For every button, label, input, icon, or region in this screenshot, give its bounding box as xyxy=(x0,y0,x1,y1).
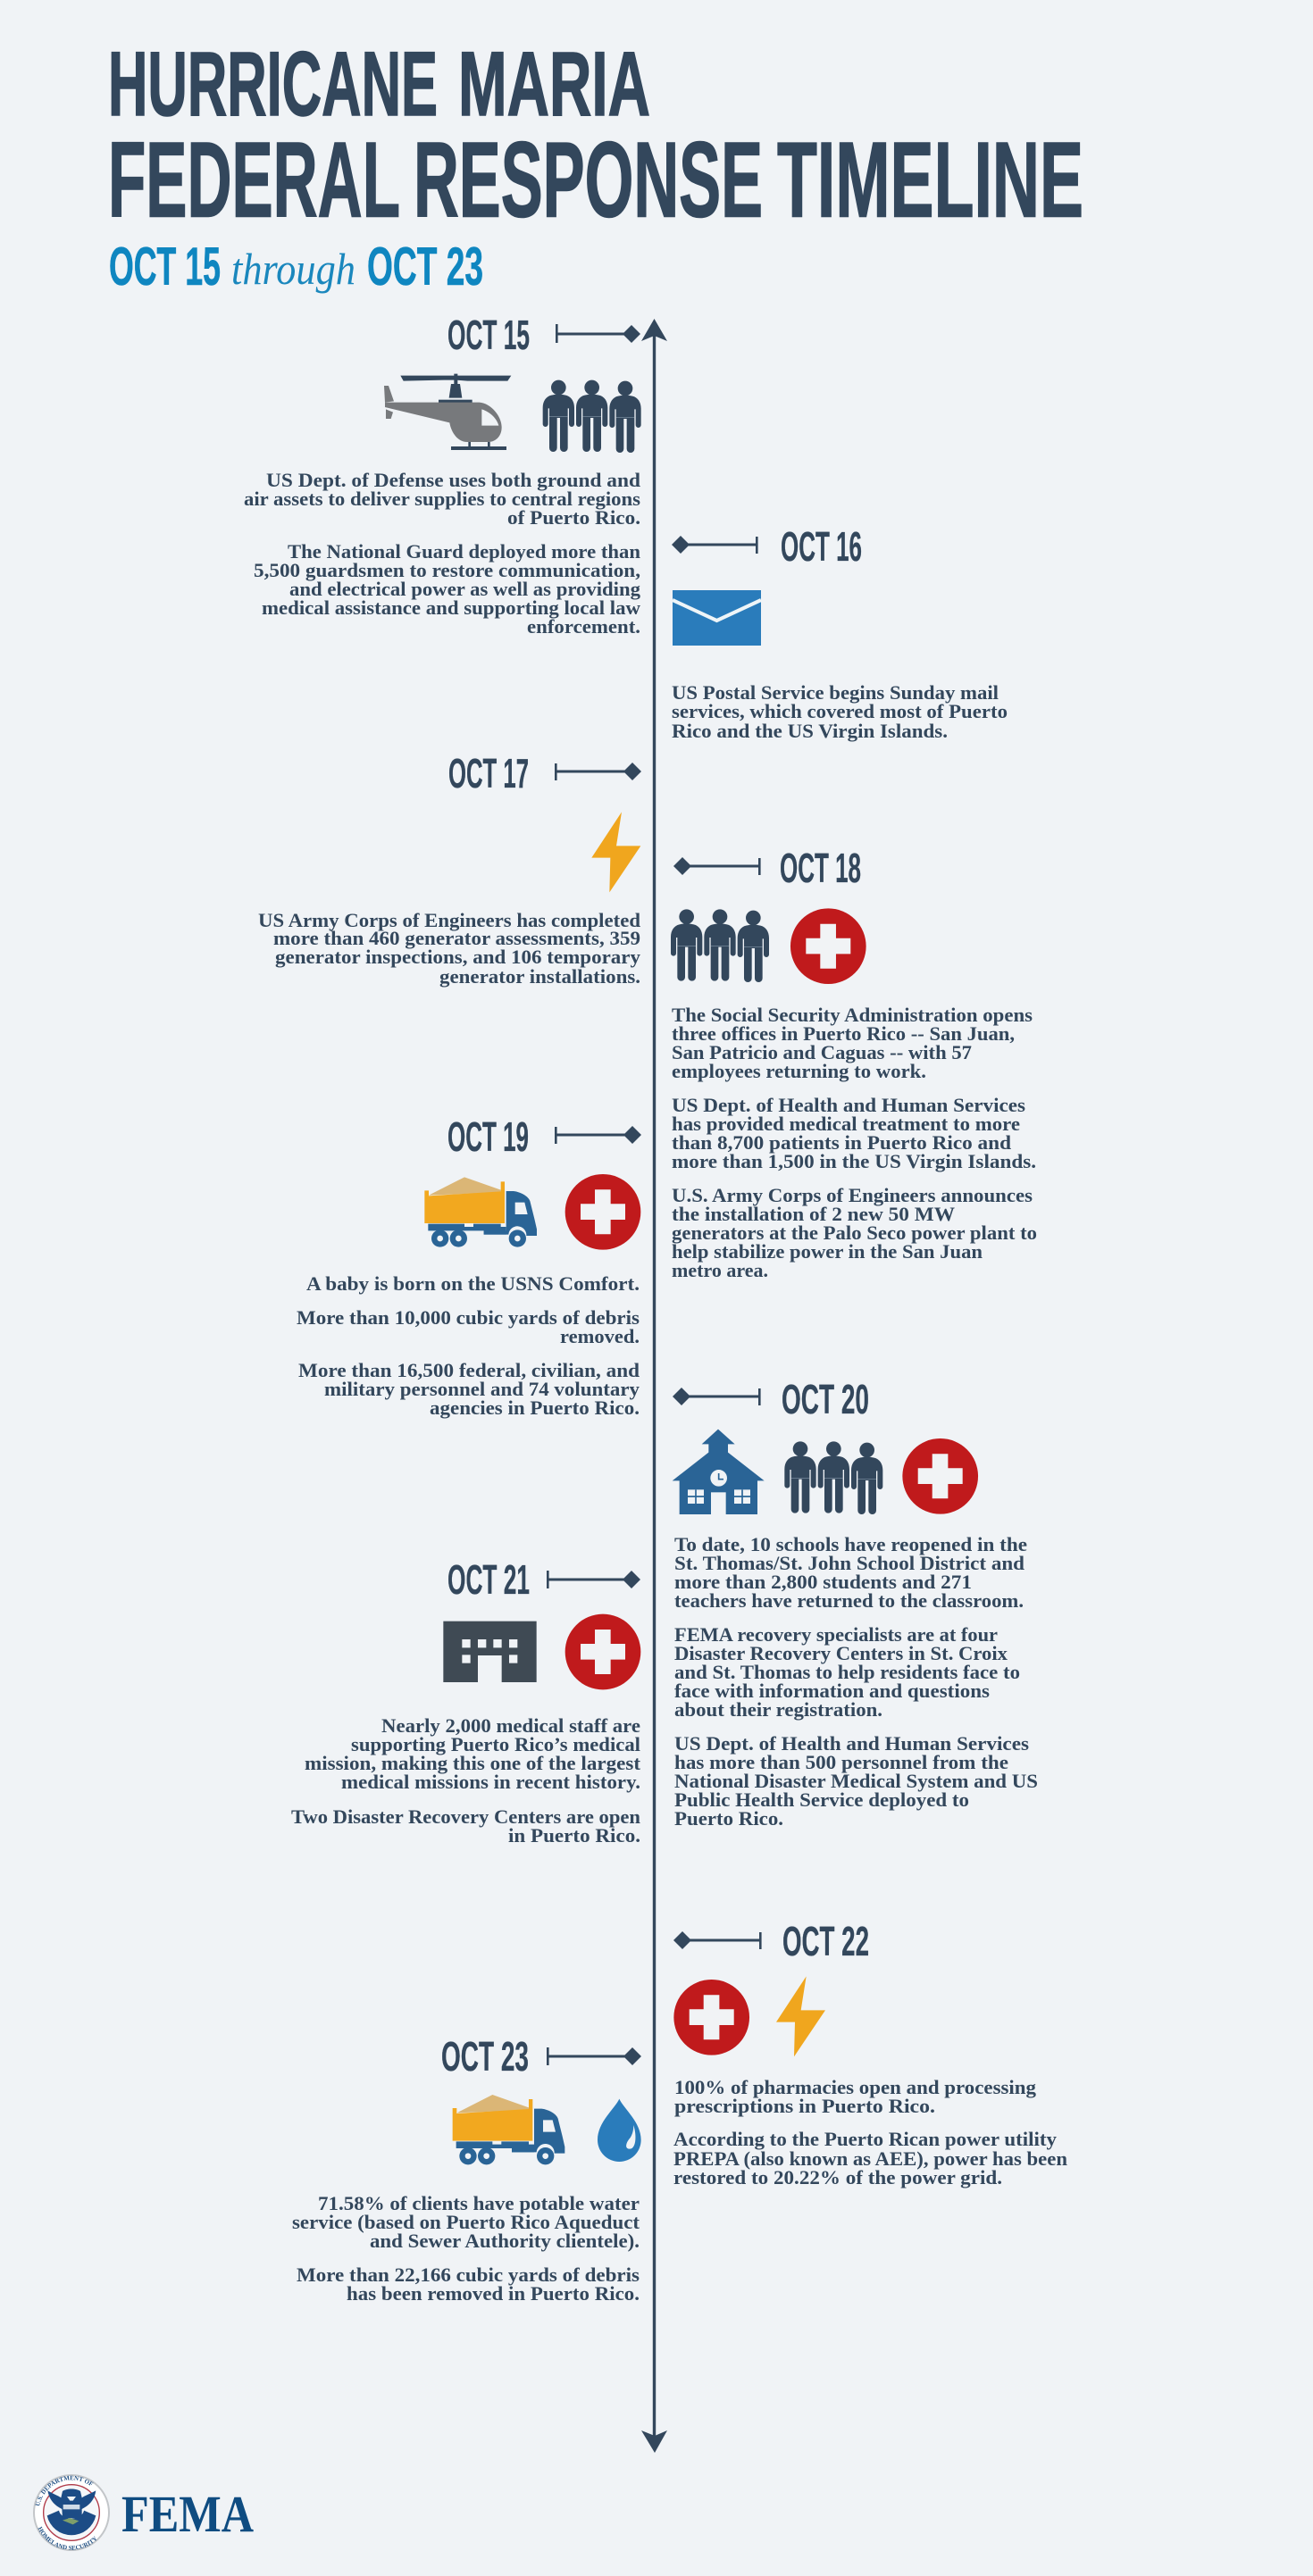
icon: lightning bolt xyxy=(776,1976,825,2056)
subtitle: date range: OCT 15 xyxy=(109,237,221,296)
icon: medical cross xyxy=(565,1614,640,1689)
text block: and St. Thomas to help residents face to xyxy=(674,1661,1020,1683)
connector xyxy=(673,857,761,875)
date label: OCT 20 xyxy=(782,1376,869,1422)
text block: and electrical power as well as providing xyxy=(289,578,641,600)
panel: Oct 22 xyxy=(673,1918,1067,2188)
icon: envelope xyxy=(673,590,761,646)
text block: US Dept. of Defense uses both ground and xyxy=(266,469,640,491)
logo: FEMA xyxy=(33,2474,254,2551)
panel: Oct 23 xyxy=(292,2033,641,2305)
date label: OCT 23 xyxy=(441,2033,529,2080)
text block: 100% of pharmacies open and processing xyxy=(674,2076,1037,2098)
connector xyxy=(672,536,758,554)
icon: medical cross xyxy=(673,1980,749,2055)
text block: generator inspections, and 106 temporary xyxy=(275,946,641,968)
text block: medical assistance and supporting local law xyxy=(262,596,641,619)
text block: generator installations. xyxy=(439,965,640,988)
text block: in Puerto Rico. xyxy=(508,1824,640,1847)
text block: metro area. xyxy=(672,1259,768,1281)
icon: building xyxy=(443,1621,537,1682)
text block: help stabilize power in the San Juan xyxy=(672,1240,983,1263)
text block: A baby is born on the USNS Comfort. xyxy=(306,1272,640,1295)
panel: Oct 20 xyxy=(673,1376,1038,1830)
timeline axis arrow xyxy=(641,319,667,2453)
text block: US Dept. of Health and Human Services xyxy=(674,1732,1029,1755)
connector xyxy=(555,763,641,780)
date label: OCT 15 xyxy=(447,312,530,358)
text block: more than 460 generator assessments, 359 xyxy=(273,927,640,949)
text block: 5,500 guardsmen to restore communication, xyxy=(254,559,640,581)
icon: DHS seal: HOMELAND SECURITY xyxy=(38,2526,96,2550)
text block: Nearly 2,000 medical staff are xyxy=(381,1714,640,1737)
text block: has provided medical treatment to more xyxy=(672,1113,1020,1135)
heading: Hurricane Maria: MARIA xyxy=(458,33,650,135)
date label: OCT 16 xyxy=(781,523,862,570)
text block: FEMA recovery specialists are at four xyxy=(674,1623,998,1646)
text block: San Patricio and Caguas -- with 57 xyxy=(672,1041,972,1063)
icon: medical cross xyxy=(902,1438,978,1514)
text block: agencies in Puerto Rico. xyxy=(430,1396,640,1419)
text block: of Puerto Rico. xyxy=(507,506,640,529)
icon: school xyxy=(673,1430,765,1514)
connector xyxy=(547,1571,640,1588)
icon: dump truck xyxy=(453,2095,565,2164)
panel: Oct 21 xyxy=(291,1556,641,1847)
icon: water drop xyxy=(598,2099,641,2162)
text block: 71.58% of clients have potable water xyxy=(318,2192,640,2214)
text block: the installation of 2 new 50 MW xyxy=(672,1203,956,1225)
icon: DHS seal: U.S. DEPARTMENT OF xyxy=(36,2475,93,2505)
text block: has been removed in Puerto Rico. xyxy=(347,2282,640,2305)
text block: More than 16,500 federal, civilian, and xyxy=(298,1359,640,1381)
heading: Hurricane Maria: HURRICANE xyxy=(108,33,438,135)
icon: DHS seal xyxy=(33,2474,110,2551)
text block: about their registration. xyxy=(674,1698,882,1721)
date label: OCT 18 xyxy=(780,845,861,891)
text block: St. Thomas/St. John School District and xyxy=(674,1552,1024,1574)
date label: OCT 17 xyxy=(448,750,529,796)
text block xyxy=(674,1533,1038,1830)
wordmark: FEMA xyxy=(121,2485,254,2543)
subtitle: date range: OCT 23 xyxy=(367,237,483,296)
connector xyxy=(673,1931,762,1949)
icon: people xyxy=(543,380,641,453)
text block: PREPA (also known as AEE), power has been xyxy=(673,2147,1067,2170)
connector xyxy=(556,324,640,343)
text block: teachers have returned to the classroom. xyxy=(674,1589,1024,1612)
text block: To date, 10 schools have reopened in the xyxy=(674,1533,1027,1555)
text block xyxy=(672,1004,1037,1281)
text block: service (based on Puerto Rico Aqueduct xyxy=(292,2211,640,2233)
connector xyxy=(673,1388,761,1405)
text block xyxy=(258,909,641,988)
title xyxy=(108,33,1083,296)
text block: More than 10,000 cubic yards of debris xyxy=(297,1306,640,1329)
panel: Oct 16 xyxy=(672,523,1008,742)
icon: people xyxy=(671,909,769,982)
text block: employees returning to work. xyxy=(672,1060,926,1082)
heading: Federal Response Timeline: RESPONSE xyxy=(414,120,763,239)
text block: US Postal Service begins Sunday mail xyxy=(672,681,999,704)
text block: enforcement. xyxy=(527,615,640,638)
panel: Oct 18 xyxy=(671,845,1037,1281)
text block xyxy=(292,2192,640,2305)
text block xyxy=(291,1714,641,1847)
text block: medical missions in recent history. xyxy=(341,1771,640,1793)
subtitle: date range: through xyxy=(231,244,355,294)
text block: US Army Corps of Engineers has completed xyxy=(258,909,640,931)
heading: Federal Response Timeline: TIMELINE xyxy=(777,120,1083,239)
text block: More than 22,166 cubic yards of debris xyxy=(297,2263,640,2286)
icon: medical cross xyxy=(790,908,866,984)
text block: prescriptions in Puerto Rico. xyxy=(674,2095,935,2117)
panel: Oct 17 xyxy=(258,750,641,988)
text block: US Dept. of Health and Human Services xyxy=(672,1094,1025,1116)
text block: The Social Security Administration opens xyxy=(672,1004,1033,1026)
subtitle: date range xyxy=(109,237,483,296)
text block: National Disaster Medical System and US xyxy=(674,1770,1038,1792)
text block: three offices in Puerto Rico -- San Juan, xyxy=(672,1022,1015,1045)
text block: military personnel and 74 voluntary xyxy=(324,1378,640,1400)
panel: Oct 19 xyxy=(297,1113,641,1419)
text block: than 8,700 patients in Puerto Rico and xyxy=(672,1131,1011,1154)
connector xyxy=(555,1126,641,1144)
text block: Rico and the US Virgin Islands. xyxy=(672,720,948,742)
icon: dump truck xyxy=(424,1177,537,1247)
icon: medical cross xyxy=(565,1174,640,1250)
text block: mission, making this one of the largest xyxy=(305,1752,641,1774)
icon: people xyxy=(784,1441,882,1514)
text block: has more than 500 personnel from the xyxy=(674,1751,1008,1773)
text block: air assets to deliver supplies to central regions xyxy=(244,488,640,510)
text block: Disaster Recovery Centers in St. Croix xyxy=(674,1642,1008,1664)
text block: generators at the Palo Seco power plant to xyxy=(672,1221,1037,1244)
text block: more than 2,800 students and 271 xyxy=(674,1571,972,1593)
text block: According to the Puerto Rican power utility xyxy=(673,2128,1058,2150)
text block: face with information and questions xyxy=(674,1680,990,1702)
text block xyxy=(297,1272,640,1419)
text block: services, which covered most of Puerto xyxy=(672,700,1008,722)
text block: supporting Puerto Rico’s medical xyxy=(351,1733,640,1755)
icon: lightning bolt xyxy=(591,812,640,892)
heading: Federal Response Timeline xyxy=(108,120,1083,239)
text block: restored to 20.22% of the power grid. xyxy=(673,2166,1002,2188)
text block: Two Disaster Recovery Centers are open xyxy=(291,1805,640,1828)
date label: OCT 21 xyxy=(447,1556,530,1603)
text block: The National Guard deployed more than xyxy=(288,540,640,563)
connector xyxy=(547,2047,641,2065)
heading: Federal Response Timeline: FEDERAL xyxy=(108,120,400,239)
text block: more than 1,500 in the US Virgin Islands. xyxy=(672,1150,1036,1172)
text block: Public Health Service deployed to xyxy=(674,1788,969,1811)
panel: Oct 15 xyxy=(244,312,641,638)
date label: OCT 22 xyxy=(782,1918,869,1964)
text block: removed. xyxy=(560,1325,640,1347)
text block: Puerto Rico. xyxy=(674,1807,783,1830)
text block: U.S. Army Corps of Engineers announces xyxy=(672,1184,1033,1206)
text block xyxy=(672,681,1008,742)
text block xyxy=(673,2076,1067,2188)
text block xyxy=(244,469,641,638)
text block: and Sewer Authority clientele). xyxy=(370,2230,640,2252)
date label: OCT 19 xyxy=(447,1113,529,1160)
icon: helicopter xyxy=(384,374,511,450)
